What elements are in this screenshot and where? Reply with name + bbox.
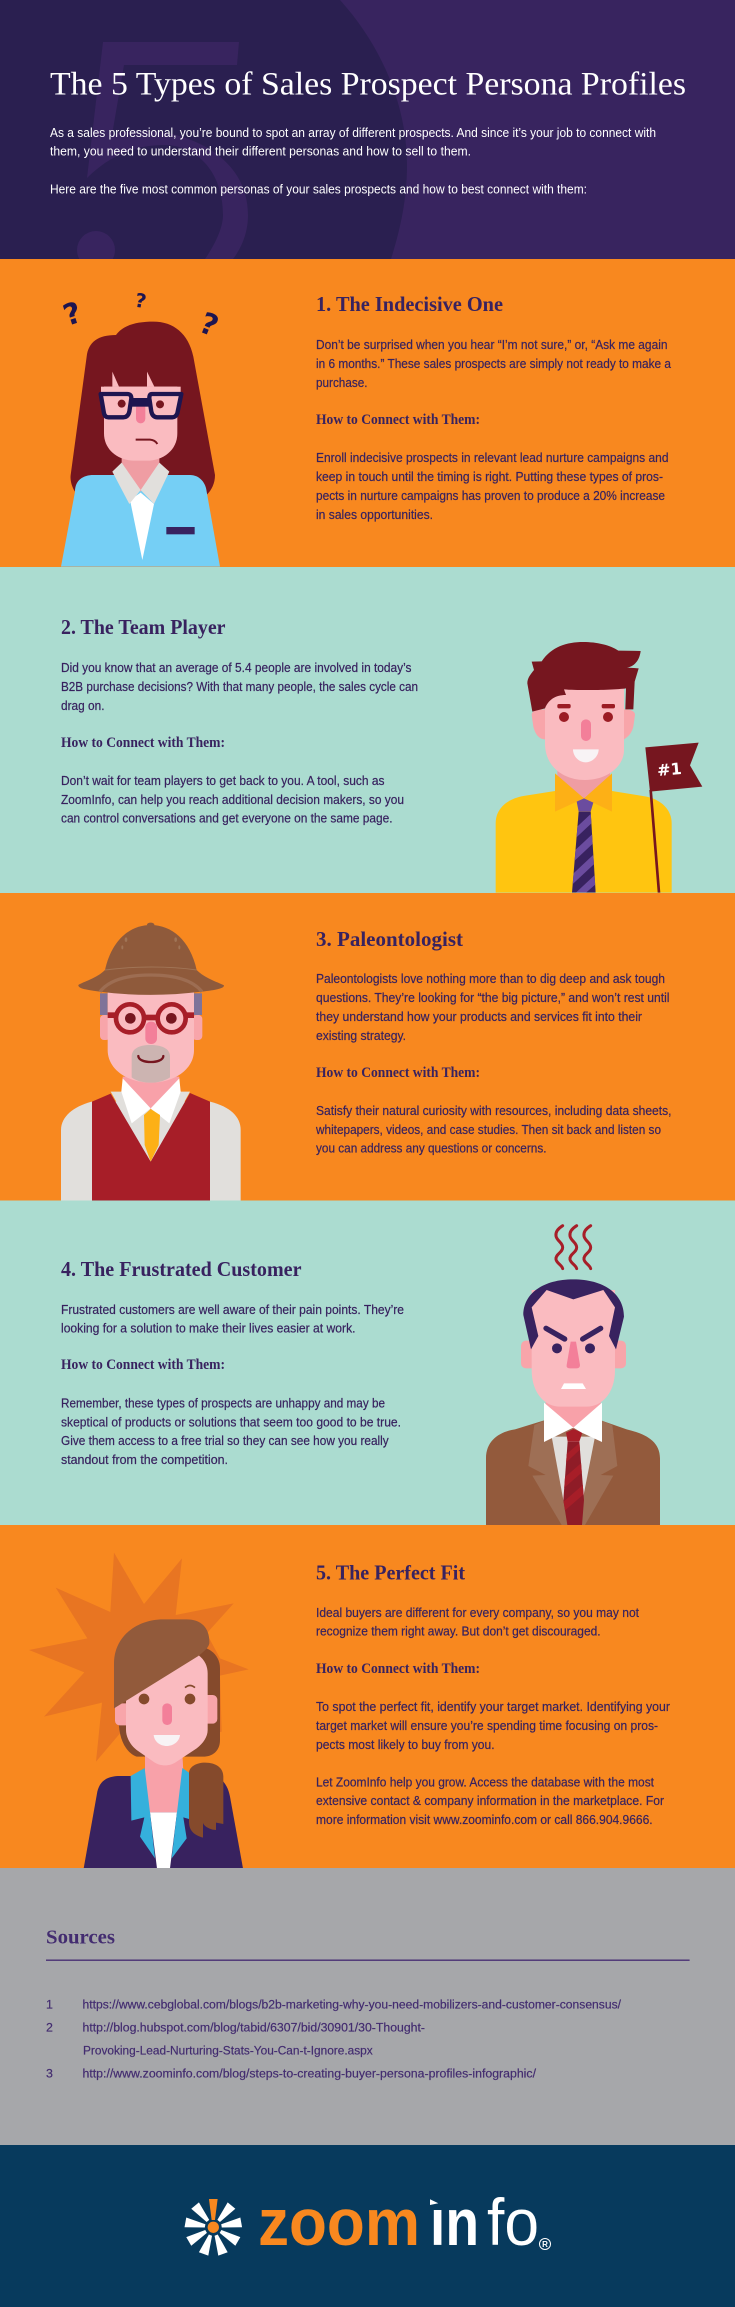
illustration: undecided woman: ? [195,306,223,344]
illustration: smiling woman with burst [29,1553,249,1868]
advice text: pects most likely to buy from you. [316,1738,495,1752]
illustration: undecided woman: ? [59,295,86,333]
body text [61,661,418,713]
source list: Provoking-Lead-Nurturing-Stats-You-Can-t-Ignore.aspx [83,2044,373,2058]
source list: http://blog.hubspot.com/blog/tabid/6307/bid/30901/30-Thought- [82,2020,425,2034]
logo: ZoomInfo: fo [487,2185,539,2259]
advice text: Enroll indecisive prospects in relevant lead nurture campaigns and [316,451,668,465]
body text: B2B purchase decisions? With that many people, the sales cycle can [61,680,418,694]
panel: 5. The Perfect Fit [0,1525,735,1868]
body text: existing strategy. [316,1029,406,1043]
source list: http://www.zoominfo.com/blog/steps-to-creating-buyer-persona-profiles-infographic/ [82,2066,537,2080]
body text [316,1606,639,1638]
advice text: Give them access to a free trial so they can see how you really [61,1434,389,1448]
illustration: team player man with flag [496,642,702,895]
body text [316,972,670,1043]
intro text: Here are the five most common personas of your sales prospects and how to best connect with them: [50,182,587,196]
decorative numeral 5 [77,42,248,269]
advice text: standout from the competition. [61,1453,228,1467]
body text: recognize them right away. But don’t get discouraged. [316,1624,601,1638]
heading: 2. The Team Player [61,615,226,639]
source list [46,1998,622,2080]
heading: 5. The Perfect Fit [316,1560,466,1584]
body text: drag on. [61,699,104,713]
logo: ZoomInfo [185,2185,550,2259]
panel: 1. The Indecisive One [0,259,735,567]
title: The 5 Types of Sales Prospect Persona Profiles [50,66,686,102]
panel: sources [0,1868,735,2145]
advice text [61,774,404,826]
panel: 4. The Frustrated Customer [0,1200,735,1527]
advice text [316,1700,670,1752]
advice text: ZoomInfo, can help you reach additional decision makers, so you [61,793,404,807]
illustration: frustrated man with steam [486,1226,660,1527]
body text: looking for a solution to make their lives easier at work. [61,1322,356,1336]
advice text: target market will ensure you’re spending time focusing on pros- [316,1719,658,1733]
subheading: How to Connect with Them: [61,1357,225,1373]
advice text: pects in nurture campaigns has proven to produce a 20% increase [316,489,665,503]
advice text: whitepapers, videos, and case studies. Then sit back and listen so [315,1123,661,1137]
intro text: As a sales professional, you’re bound to spot an array of different prospects. And since it’s your job to connect with [50,125,656,140]
logo: ZoomInfo: zoom [258,2185,420,2259]
illustration: undecided woman: ? [133,289,148,313]
illustration: team player man with flag: #1 [656,759,682,780]
logo: ZoomInfo: R [542,2240,548,2249]
body text: purchase. [316,376,368,390]
call to action text: Let ZoomInfo help you grow. Access the database with the most [316,1776,654,1790]
advice text: in sales opportunities. [316,508,433,522]
illustration: paleontologist with hat [61,923,241,1201]
body text: in 6 months.” These sales prospects are simply not ready to make a [316,357,671,371]
heading: 3. Paleontologist [316,927,464,951]
body text: Did you know that an average of 5.4 people are involved in today’s [61,661,412,675]
icon: sunburst [185,2199,242,2256]
call to action text: extensive contact & company information in the marketplace. For [316,1794,664,1808]
advice text: Don’t wait for team players to get back to you. A tool, such as [61,774,384,788]
advice text: can control conversations and get everyone on the same page. [61,812,392,826]
body text [61,1303,404,1336]
advice text: Satisfy their natural curiosity with resources, including data sheets, [316,1104,672,1118]
body text: Frustrated customers are well aware of their pain points. They’re [61,1303,404,1317]
intro text: them, you need to understand their different personas and how to sell to them. [50,144,471,158]
heading: Sources [46,1926,115,1948]
source list: 2 [46,2020,53,2034]
body text: Ideal buyers are different for every company, so you may not [316,1606,639,1620]
body text: Don’t be surprised when you hear “I’m not sure,” or, “Ask me again [316,338,668,352]
body text: questions. They’re looking for “the big picture,” and won’t rest until [316,991,670,1005]
body text: Paleontologists love nothing more than to dig deep and ask tough [316,972,665,986]
source list: 3 [46,2066,53,2080]
panel: header [0,0,735,269]
advice text [315,1104,672,1156]
panel: 2. The Team Player [0,567,735,895]
body text: they understand how your products and services fit into their [316,1010,642,1024]
call to action text [316,1776,664,1827]
advice text: skeptical of products or solutions that seem too good to be true. [61,1416,401,1430]
heading: 1. The Indecisive One [316,292,503,316]
advice text: To spot the perfect fit, identify your target market. Identifying your [316,1700,670,1714]
advice text: keep in touch until the timing is right. Putting these types of pros- [316,470,663,484]
subheading: How to Connect with Them: [316,412,480,428]
panel: footer [0,2145,735,2307]
advice text: Remember, these types of prospects are unhappy and may be [61,1396,385,1410]
heading: 4. The Frustrated Customer [61,1257,302,1281]
advice text: you can address any questions or concerns. [316,1142,546,1156]
icon: steam lines [556,1226,591,1269]
subheading: How to Connect with Them: [316,1661,480,1677]
icon: starburst [29,1553,249,1762]
panel: 3. Paleontologist [0,893,735,1201]
source list: https://www.cebglobal.com/blogs/b2b-marketing-why-you-need-mobilizers-and-customer-consensus/ [82,1998,622,2012]
advice text [316,451,668,522]
logo: ZoomInfo: in [430,2185,479,2259]
source list: 1 [46,1998,53,2012]
subheading: How to Connect with Them: [61,735,225,751]
subheading: How to Connect with Them: [316,1065,480,1081]
call to action text: more information visit www.zoominfo.com or call 866.904.9666. [316,1813,653,1827]
intro text [50,125,656,196]
advice text [61,1396,401,1467]
illustration: undecided woman [59,289,223,567]
body text [316,338,671,390]
